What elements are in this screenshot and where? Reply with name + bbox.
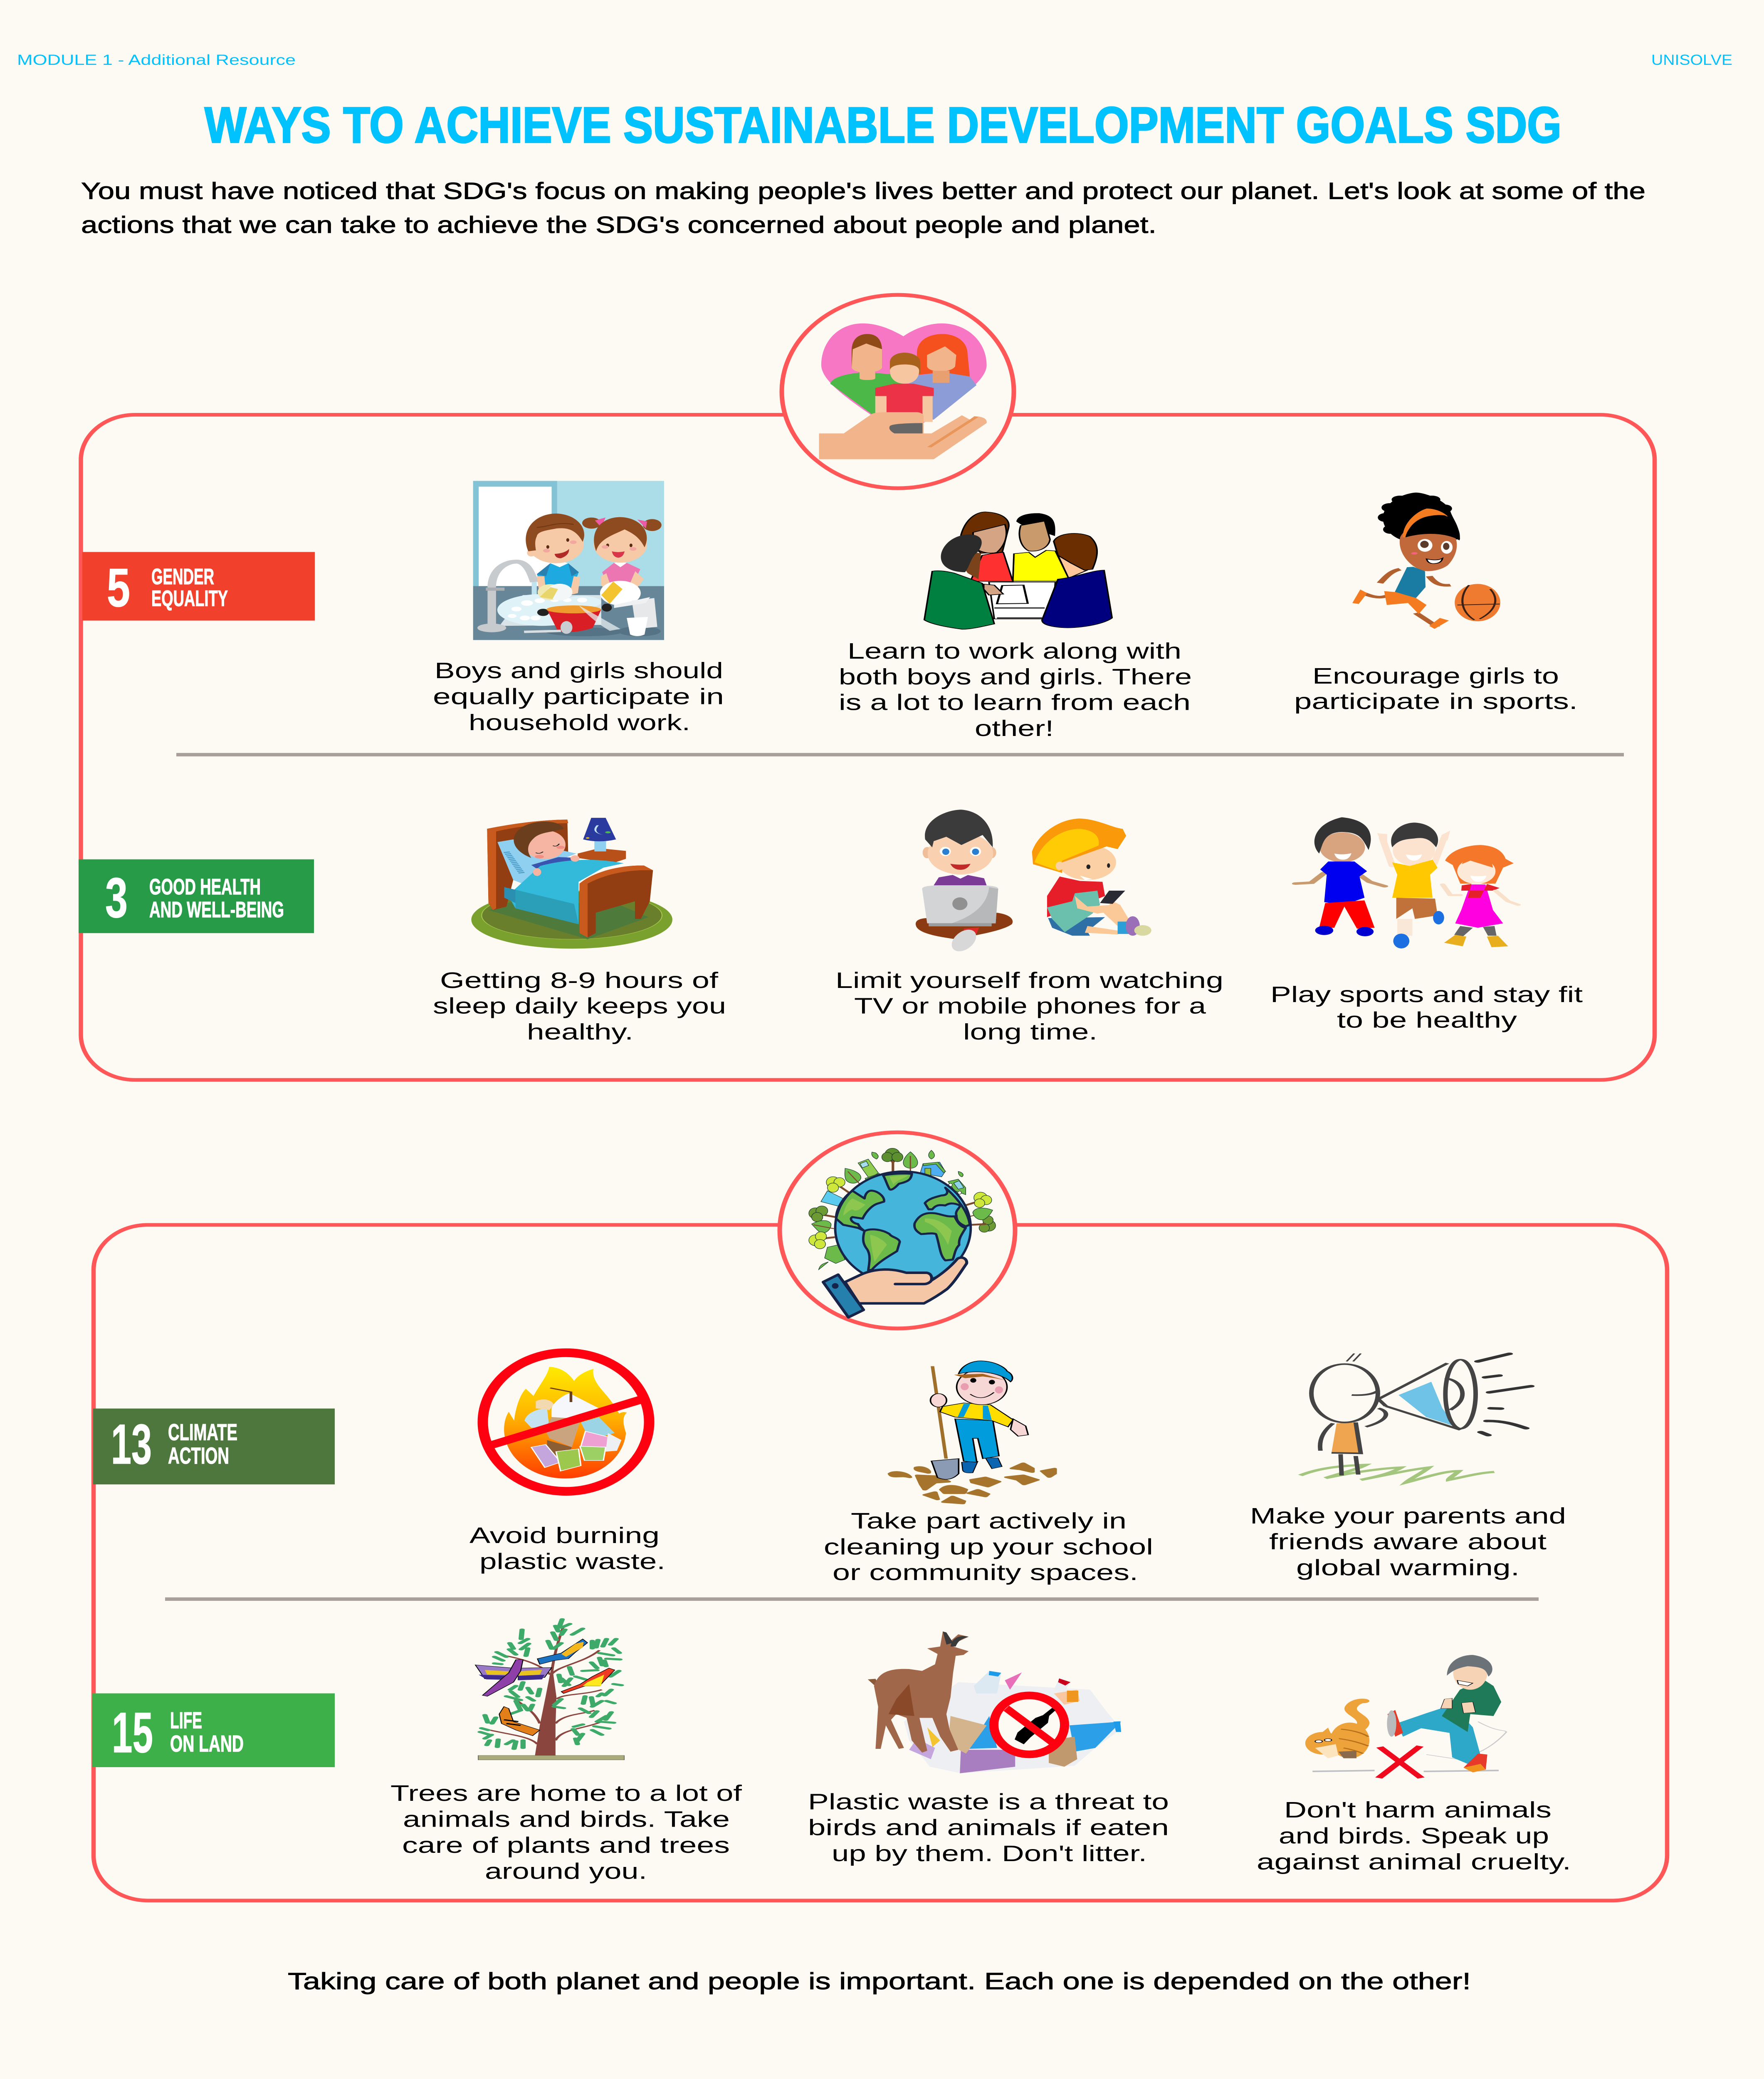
- goal badge: 3 good health and well-being: GOOD HEALTH: [149, 874, 261, 899]
- caption: Learn to work along with: [847, 639, 1181, 664]
- goal badge: 3 good health and well-being: AND WELL-BEING: [149, 897, 284, 922]
- closing statement: Taking care of both planet and people is important. Each one is depended on the other!: [288, 1968, 1471, 1995]
- intro paragraph: You must have noticed that SDG's focus on making people's lives better and protect our planet. Let's look at some of the: [81, 178, 1645, 204]
- caption: [433, 968, 726, 1044]
- caption: or community spaces.: [833, 1560, 1138, 1585]
- panel: people: [79, 295, 1655, 1080]
- panel border: planet: [94, 1225, 1667, 1901]
- intro paragraph: [81, 178, 1645, 238]
- intro paragraph: actions that we can take to achieve the SDG's concerned about people and planet.: [81, 212, 1156, 238]
- icon: family in heart on a hand: [819, 323, 987, 459]
- caption: [1257, 1798, 1571, 1874]
- goal badge: 5 gender equality: 5: [107, 557, 130, 618]
- illustration: boy kicking a cat with a red cross: [1305, 1655, 1507, 1778]
- circle badge: people: [782, 295, 1014, 488]
- caption: care of plants and trees: [402, 1833, 730, 1858]
- illustration: boys using a laptop and a phone: [916, 810, 1151, 952]
- circle badge: planet: [780, 1132, 1015, 1328]
- caption: [1250, 1504, 1566, 1580]
- caption: Boys and girls should: [435, 659, 723, 683]
- illustration: boy with shovel cleaning up: [890, 1361, 1055, 1504]
- illustration: boy sleeping in bed: [471, 818, 672, 948]
- caption: Limit yourself from watching: [835, 968, 1223, 993]
- goal badge: 13 climate action: [93, 1409, 335, 1484]
- caption: around you.: [485, 1859, 647, 1884]
- caption: [1294, 664, 1578, 714]
- goal badge: 5 gender equality: EQUALITY: [151, 586, 228, 611]
- caption: Take part actively in: [851, 1509, 1127, 1533]
- illustration: goat near plastic waste with no-bottle sign: [868, 1632, 1121, 1773]
- caption: [433, 659, 724, 735]
- caption: Avoid burning: [469, 1523, 660, 1548]
- goal badge: 15 life on land: [92, 1693, 335, 1767]
- caption: animals and birds. Take: [403, 1807, 730, 1832]
- goal badge: 13 climate action: CLIMATE: [168, 1420, 237, 1445]
- caption: and birds. Speak up: [1279, 1824, 1549, 1848]
- caption: plastic waste.: [479, 1549, 665, 1574]
- caption: [839, 639, 1192, 741]
- caption: Encourage girls to: [1312, 664, 1559, 689]
- illustration: girl playing basketball: [1352, 493, 1500, 629]
- caption: against animal cruelty.: [1257, 1850, 1571, 1874]
- illustration: child with megaphone: [1300, 1353, 1531, 1482]
- caption: [824, 1509, 1153, 1585]
- caption: Make your parents and: [1250, 1504, 1566, 1528]
- header label: module: MODULE 1 - Additional Resource: [17, 52, 296, 68]
- illustration: no burning plastic waste sign: [483, 1353, 649, 1491]
- caption: healthy.: [527, 1020, 633, 1044]
- caption: long time.: [963, 1020, 1097, 1044]
- goal badge: 5 gender equality: GENDER: [151, 565, 214, 589]
- caption: [390, 1781, 742, 1884]
- goal badge: 13 climate action: ACTION: [168, 1443, 229, 1469]
- caption: Plastic waste is a threat to: [808, 1790, 1169, 1814]
- icon: earth held in a hand: [809, 1148, 996, 1317]
- caption: both boys and girls. There: [839, 665, 1192, 689]
- caption: [469, 1523, 665, 1574]
- goal badge: 15 life on land: 15: [112, 1701, 153, 1765]
- caption: global warming.: [1296, 1556, 1519, 1580]
- caption: Getting 8-9 hours of: [440, 968, 719, 993]
- caption: friends aware about: [1269, 1530, 1547, 1554]
- caption: Don't harm animals: [1284, 1798, 1552, 1822]
- goal badge: 3 good health and well-being: [79, 859, 314, 933]
- caption: is a lot to learn from each: [839, 690, 1191, 715]
- caption: to be healthy: [1337, 1008, 1517, 1032]
- illustration: boy and girl washing dishes: [473, 481, 664, 640]
- caption: TV or mobile phones for a: [854, 994, 1206, 1018]
- illustration: children working together at a table: [924, 512, 1112, 629]
- header label: UNISOLVE: UNISOLVE: [1651, 52, 1732, 68]
- illustration: three children playing: [1295, 817, 1518, 948]
- caption: household work.: [469, 711, 690, 735]
- caption: Play sports and stay fit: [1270, 983, 1583, 1007]
- caption: [1270, 983, 1583, 1032]
- goal badge: 13 climate action: 13: [111, 1412, 152, 1476]
- caption: other!: [975, 716, 1054, 741]
- goal badge: 3 good health and well-being: 3: [105, 866, 128, 929]
- caption: [835, 968, 1223, 1044]
- caption: participate in sports.: [1294, 689, 1578, 714]
- caption: Trees are home to a lot of: [390, 1781, 742, 1806]
- panel border: people: [81, 415, 1655, 1080]
- caption: equally participate in: [433, 684, 724, 709]
- panel: planet: [92, 1132, 1667, 1901]
- caption: birds and animals if eaten: [808, 1815, 1169, 1840]
- caption: [808, 1790, 1169, 1866]
- goal badge: 15 life on land: LIFE: [170, 1708, 202, 1733]
- caption: up by them. Don't litter.: [832, 1842, 1147, 1866]
- illustration: tree with birds: [475, 1619, 624, 1760]
- goal badge: 15 life on land: ON LAND: [170, 1731, 244, 1757]
- caption: cleaning up your school: [824, 1535, 1153, 1559]
- goal badge: 5 gender equality: [82, 552, 315, 620]
- caption: sleep daily keeps you: [433, 994, 726, 1018]
